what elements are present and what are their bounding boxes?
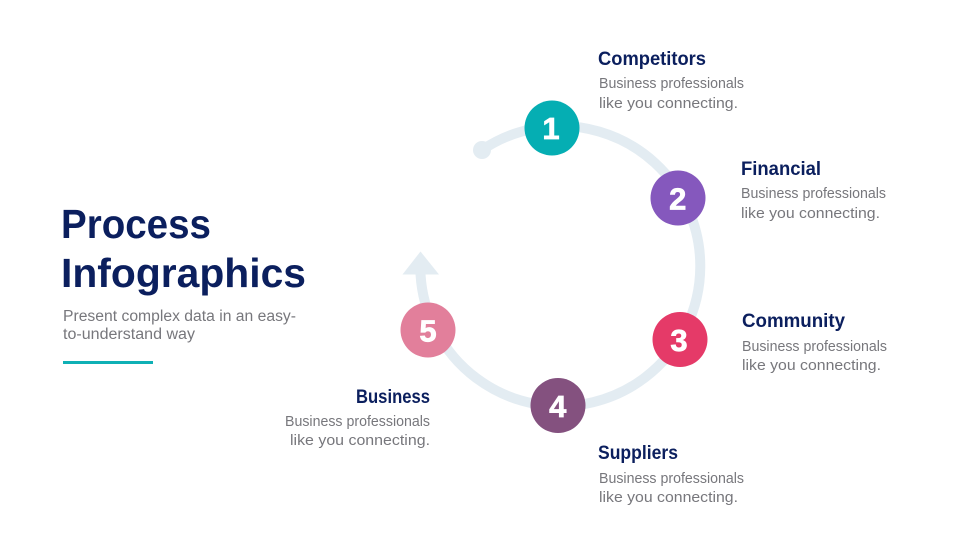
label: Business: Business professionals	[285, 414, 430, 430]
step 2 node: 2	[669, 182, 686, 216]
label: Financial: Financial	[741, 159, 821, 180]
step 1 node: 1	[542, 111, 560, 146]
step 3 node: 3	[670, 323, 688, 358]
label: Community	[742, 311, 887, 374]
label: Suppliers: Suppliers	[598, 443, 678, 464]
step 3 node	[652, 312, 708, 367]
step 4 node: 4	[549, 389, 567, 424]
label: Financial	[741, 159, 886, 222]
step 4 node	[530, 378, 586, 433]
label: Competitors: like you connecting.	[599, 96, 738, 112]
label: Community: Business professionals	[742, 339, 887, 355]
label: Suppliers: Business professionals	[599, 471, 744, 487]
title: Infographics	[61, 250, 306, 296]
label: Competitors: Business professionals	[599, 76, 744, 92]
title	[61, 201, 306, 296]
label: Financial: like you connecting.	[741, 206, 880, 222]
subtitle: Present complex data in an easy-	[63, 308, 296, 325]
circular process arrow	[402, 126, 700, 406]
label: Community: like you connecting.	[742, 358, 881, 374]
label: Business: like you connecting.	[290, 433, 430, 449]
label: Competitors	[598, 49, 744, 112]
subtitle	[63, 308, 296, 343]
title: Process	[61, 201, 211, 247]
label: Suppliers: like you connecting.	[599, 490, 738, 506]
label: Business	[285, 387, 430, 449]
label: Suppliers	[598, 443, 744, 506]
accent underline	[63, 361, 153, 364]
label: Financial: Business professionals	[741, 186, 886, 202]
step 5 node	[400, 302, 456, 358]
step 1 node	[524, 100, 580, 156]
label: Competitors: Competitors	[598, 49, 706, 70]
label: Community: Community	[742, 311, 845, 332]
step 2 node	[650, 170, 706, 226]
label: Business: Business	[356, 387, 430, 408]
subtitle: to-understand way	[63, 326, 195, 343]
step 5 node: 5	[419, 314, 437, 348]
